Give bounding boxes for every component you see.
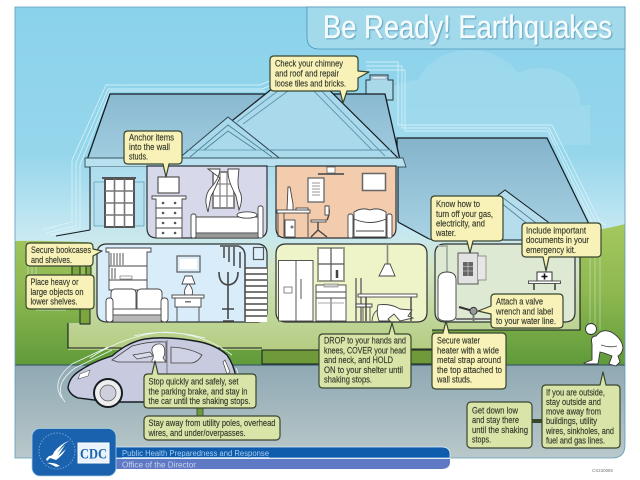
- foundation: [262, 350, 432, 364]
- small gable: [177, 117, 283, 161]
- car: [58, 332, 238, 407]
- right wing roof: [397, 138, 589, 240]
- callout: anchor items: [124, 131, 182, 177]
- sofa: [106, 289, 168, 322]
- callout: heavy objects: lower shelves.: [30, 296, 78, 306]
- room: upstairs bedroom: [147, 166, 267, 238]
- callout: chimney and roof: loose tiles and bricks.: [275, 78, 346, 88]
- callout: get down low: until the shaking: [472, 425, 528, 435]
- lower wall: [56, 230, 580, 350]
- electrical panel: [458, 253, 486, 284]
- callout: anchor items: studs.: [129, 152, 148, 162]
- bookcase: [106, 248, 151, 290]
- clouds: [375, 50, 590, 150]
- main roof: [87, 94, 400, 160]
- callout: get down low: Get down low: [472, 406, 519, 416]
- publication code: CS230085: [592, 468, 613, 473]
- road: [15, 365, 625, 458]
- callouts: [26, 56, 620, 448]
- callout: if outside: wires, sinkholes, and: [545, 426, 614, 436]
- callout: important documents: [522, 223, 601, 271]
- callout: important documents: documents in your: [526, 235, 589, 245]
- callout: drop cover hold on: [319, 323, 411, 388]
- callout: turn off utilities: electricity, and: [436, 218, 485, 228]
- callout: water heater: wall studs.: [436, 374, 472, 384]
- shaking outlines: [28, 60, 606, 330]
- callout: important documents: Include important: [526, 226, 586, 236]
- callout: valve wrench: to your water line.: [496, 316, 556, 326]
- eaves: [85, 158, 406, 167]
- chimney: [366, 75, 393, 100]
- body: [68, 338, 236, 402]
- callout: water heater: [432, 321, 506, 389]
- room: kitchen: [276, 244, 427, 322]
- kerb line: [15, 364, 625, 366]
- motion lines: [58, 332, 238, 402]
- bed: [348, 209, 392, 238]
- person taking cover: [372, 304, 413, 321]
- side table: [172, 295, 204, 322]
- bed: [191, 206, 263, 238]
- callout: if outside: stay outside and: [546, 397, 601, 407]
- big gable: [183, 64, 400, 160]
- callout: turn off utilities: turn off your gas,: [436, 209, 493, 219]
- right wing small gable: [488, 190, 548, 240]
- wheel: [94, 379, 122, 407]
- callout: secure bookcases: [26, 243, 102, 266]
- callout: stay away from poles: [144, 416, 280, 440]
- callout: valve wrench: Attach a valve: [496, 296, 543, 306]
- callout: heavy objects: [26, 275, 94, 309]
- room: utility room: [435, 244, 575, 322]
- refrigerator: [278, 260, 313, 321]
- picture: [177, 256, 200, 272]
- callout: heavy objects: large objects on: [30, 287, 84, 297]
- purple band: [110, 459, 450, 469]
- callout: stop the car: Stop quickly and safely, set: [148, 376, 239, 386]
- callout: get down low: [467, 402, 532, 448]
- callout: stop the car: [144, 361, 256, 408]
- callout: if outside: fuel and gas lines.: [546, 436, 605, 446]
- grass: [15, 224, 625, 366]
- callout: secure bookcases: Secure bookcases: [31, 245, 91, 255]
- connector between centre callouts: [411, 348, 432, 350]
- connector between outdoor callouts: [532, 419, 542, 423]
- HHS seal: [39, 433, 75, 469]
- wall chart: [308, 178, 324, 202]
- table and chair: [356, 278, 417, 321]
- callout: if outside: buildings, utility: [546, 416, 598, 426]
- emergency kit on shelf: [528, 272, 560, 290]
- callout: secure bookcases: and shelves.: [31, 255, 72, 265]
- callout: turn off utilities: Know how to: [436, 199, 480, 209]
- callout: if outside: move away from: [546, 406, 601, 416]
- title banner: [307, 7, 625, 49]
- callout: anchor items: into the wall: [129, 142, 170, 152]
- ceiling fan: [318, 167, 344, 174]
- callout: valve wrench: [478, 294, 563, 328]
- lamp: [182, 276, 195, 295]
- house: [28, 60, 606, 364]
- callout: heavy objects: Place heavy or: [30, 277, 79, 287]
- porch posts: [72, 266, 91, 324]
- upper wall: [90, 167, 398, 242]
- connector between car callouts: [197, 408, 203, 416]
- water valve and wrench: [459, 307, 477, 322]
- callout: drop cover hold on: ON to your shelter until: [324, 365, 403, 375]
- callout: water heater: Secure water: [437, 336, 480, 346]
- office chair: [311, 206, 329, 237]
- coat rack: [219, 272, 238, 321]
- programme name: Public Health Preparedness and Response: [122, 449, 269, 458]
- callout: turn off utilities: [431, 196, 503, 253]
- callout: stop the car: the parking brake, and stay in: [148, 386, 248, 396]
- callout: get down low: stops.: [472, 434, 491, 444]
- callout: water heater: metal strap around: [437, 355, 501, 365]
- desk and monitor: [277, 187, 310, 237]
- room: living room: [97, 244, 267, 322]
- footer bar: [110, 447, 450, 470]
- window with curtains: [206, 169, 242, 212]
- callout: water heater: heater with a wide: [437, 346, 499, 356]
- callout: chimney and roof: Check your chimney: [275, 58, 344, 68]
- CDC logo: [32, 428, 116, 476]
- pendant lamp: [379, 244, 395, 276]
- callout: if outside: [542, 372, 620, 448]
- blue band: [110, 447, 450, 458]
- callout: drop cover hold on: DROP to your hands and: [324, 336, 406, 346]
- sky: [15, 7, 625, 252]
- water heater: [438, 272, 500, 321]
- picture: [158, 177, 179, 193]
- callout: chimney and roof: and roof and repair: [275, 68, 339, 78]
- large picture: [362, 174, 386, 190]
- callout: water heater: the top attached to: [437, 365, 502, 375]
- callout: stay away from poles: wires, and under/overpasses.: [148, 428, 246, 438]
- callout: get down low: and stay there: [472, 415, 519, 425]
- callout: drop cover hold on: and neck, and HOLD: [324, 355, 393, 365]
- callout: stop the car: the car until the shaking stops.: [148, 396, 250, 406]
- stairs: [220, 246, 267, 322]
- callout: if outside: If you are outside,: [546, 388, 605, 398]
- office name: Office of the Director: [122, 460, 196, 470]
- callout: valve wrench: wrench and label: [495, 306, 553, 316]
- dresser: [152, 196, 186, 238]
- driver: [133, 344, 166, 362]
- callout: anchor items: Anchor items: [129, 132, 175, 142]
- callout: stay away from poles: Stay away from utility poles, overhead: [148, 418, 276, 428]
- windows: [112, 342, 166, 362]
- CDC wordmark: CDC: [80, 446, 107, 462]
- kitchen window: [318, 248, 344, 281]
- callout: drop cover hold on: shaking stops.: [324, 374, 372, 384]
- room: upstairs office: [276, 166, 396, 238]
- callout: important documents: emergency kit.: [526, 245, 576, 255]
- callout: chimney and roof: [270, 56, 369, 103]
- person outside crouching: [584, 324, 623, 366]
- upper left window with shutters: [94, 178, 144, 227]
- callout: drop cover hold on: knees, COVER your head: [324, 346, 406, 356]
- stove: [316, 284, 346, 321]
- callout: turn off utilities: water.: [435, 228, 456, 238]
- big gable trim: [237, 72, 392, 156]
- pipe: [438, 246, 447, 272]
